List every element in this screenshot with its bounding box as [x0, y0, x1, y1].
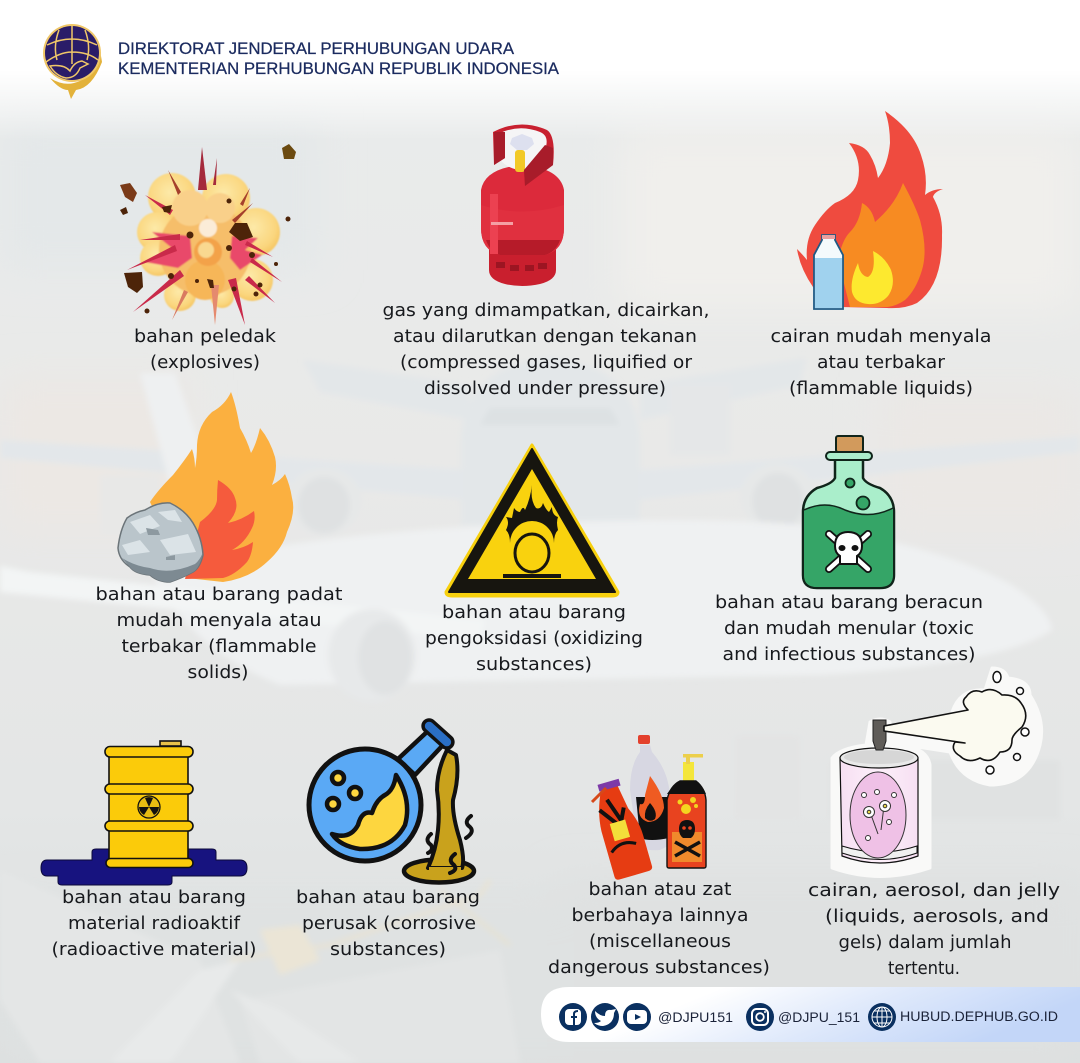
icon: ministry logo [43, 24, 102, 99]
panel: corrosive substances [296, 717, 480, 960]
header: logo and agency name [43, 24, 559, 99]
text: radioactive label: bahan atau barang [62, 888, 246, 908]
panel: oxidizing substances [425, 445, 643, 675]
panel: compressed gases [382, 124, 710, 399]
panel: radioactive material [41, 741, 256, 960]
text: compressed gases label: atau dilarutkan dengan tekanan [393, 327, 697, 347]
heading: agency name [118, 40, 559, 78]
icon: radioactive barrel [41, 741, 247, 885]
text: aerosols label: gels) dalam jumlah [838, 933, 1012, 953]
text: miscellaneous label: berbahaya lainnya [572, 906, 748, 926]
icon: youtube [623, 1003, 651, 1031]
text: compressed gases label: gas yang dimampatkan, dicairkan, [382, 301, 710, 321]
text: aerosols label: cairan, aerosol, dan jelly [808, 881, 1060, 901]
text: flammable liquids label [770, 327, 992, 399]
icon: globe [868, 1003, 896, 1031]
text: flammable solids label: bahan atau barang padat [96, 585, 343, 605]
text: toxic label: bahan atau barang beracun [715, 593, 983, 613]
text: flammable solids label [96, 585, 343, 683]
text: oxidizing label: substances) [476, 655, 592, 675]
panel: flammable liquids [770, 111, 992, 399]
icon: instagram [746, 1003, 774, 1031]
text: corrosive label: substances) [330, 940, 446, 960]
text: toxic label: dan mudah menular (toxic [724, 619, 974, 639]
footer: social media bar [541, 987, 1080, 1042]
text: compressed gases label: (compressed gases, liquified or [400, 353, 693, 373]
icon: hazardous bottles [589, 735, 706, 881]
text: flammable liquids label: cairan mudah menyala [770, 327, 992, 347]
panel: toxic substances [715, 436, 983, 665]
text: oxidizing label: pengoksidasi (oxidizing [425, 629, 643, 649]
text: explosives label: bahan peledak [134, 327, 277, 347]
text: flammable solids label: solids) [188, 663, 248, 683]
text: miscellaneous label: bahan atau zat [588, 880, 732, 900]
icon: gas cylinder [481, 124, 564, 286]
text: aerosols label: tertentu. [888, 959, 960, 979]
text: corrosive label: perusak (corrosive [302, 914, 476, 934]
panel: explosives [120, 144, 296, 373]
icon: twitter [591, 1003, 619, 1031]
text: explosives label [134, 327, 277, 373]
icon: facebook [559, 1003, 587, 1031]
text: flammable liquids label: atau terbakar [817, 353, 946, 373]
icon: aerosol spray can [832, 668, 1042, 876]
panel: flammable solids [96, 392, 343, 683]
text: explosives label: (explosives) [150, 353, 260, 373]
icon: explosion [120, 144, 296, 325]
heading: agency name: KEMENTERIAN PERHUBUNGAN REPUBLIK INDONESIA [118, 60, 559, 78]
icon: flame with bottle [797, 111, 943, 309]
text: miscellaneous label [548, 880, 770, 978]
text: miscellaneous label: dangerous substances) [548, 958, 770, 978]
text: toxic label [715, 593, 983, 665]
text: oxidizing label [425, 603, 643, 675]
text: flammable solids label: terbakar (flammable [122, 637, 316, 657]
text: oxidizing label: bahan atau barang [442, 603, 626, 623]
panel: liquids, aerosols and gels [808, 668, 1060, 979]
text: corrosive label [296, 888, 480, 960]
icon: corrosive flask [309, 717, 474, 882]
icon: poison bottle [803, 436, 894, 588]
panel: miscellaneous dangerous substances [548, 735, 770, 978]
text: flammable liquids label: (flammable liquids) [789, 379, 973, 399]
text: compressed gases label: dissolved under pressure) [424, 379, 666, 399]
heading: agency name: DIREKTORAT JENDERAL PERHUBUNGAN UDARA [118, 40, 514, 58]
icon: burning rock [118, 392, 293, 582]
text: flammable solids label: mudah menyala atau [116, 611, 322, 631]
text: corrosive label: bahan atau barang [296, 888, 480, 908]
text: miscellaneous label: (miscellaneous [589, 932, 731, 952]
text: radioactive label [52, 888, 256, 960]
text: radioactive label: (radioactive material) [52, 940, 256, 960]
text: handle one: @DJPU151 [658, 1010, 733, 1025]
text: website: HUBUD.DEPHUB.GO.ID [900, 1009, 1058, 1024]
icon: oxidizer warning triangle [446, 445, 618, 596]
text: toxic label: and infectious substances) [722, 645, 976, 665]
text: aerosols label: (liquids, aerosols, and [825, 907, 1049, 927]
text: compressed gases label [382, 301, 710, 399]
text: handle two: @DJPU_151 [778, 1010, 860, 1025]
text: aerosols label [808, 881, 1060, 979]
text: radioactive label: material radioaktif [68, 914, 241, 934]
